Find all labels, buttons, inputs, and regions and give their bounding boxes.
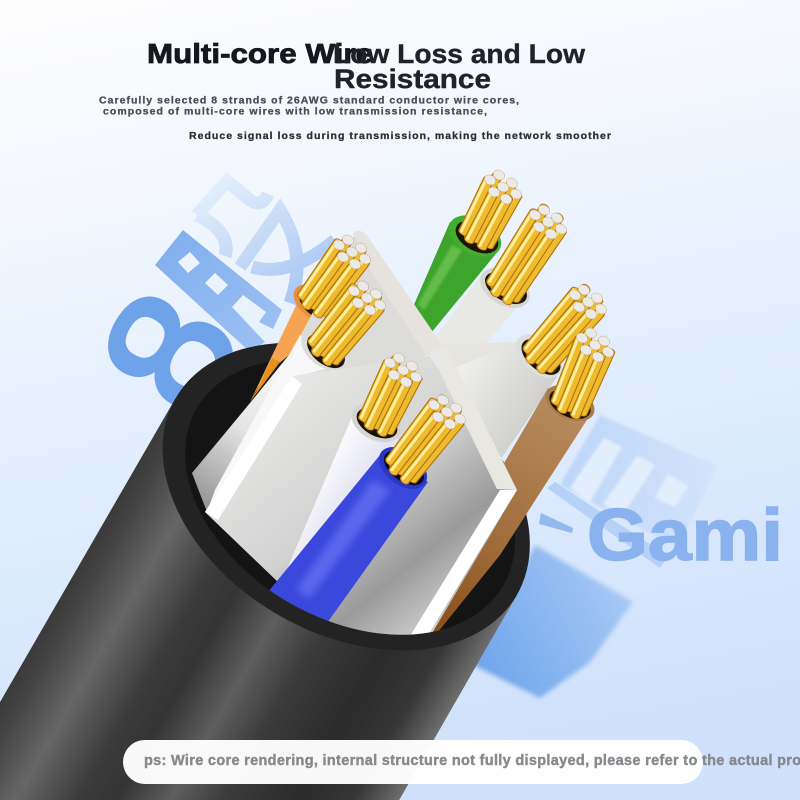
- white wire jacket left: [207, 319, 355, 512]
- gold conductor: white lower wire: [357, 351, 424, 437]
- Gami watermark text: Gami: [587, 495, 783, 576]
- gold conductor: blue wire: [383, 393, 468, 485]
- decorative blue stripes: [539, 482, 668, 568]
- description line one: Carefully selected 8 strands of 26AWG standard conductor wire cores,: [99, 94, 519, 106]
- gold conductor: white right wire: [520, 283, 609, 374]
- white wire jacket beside green: [428, 260, 537, 352]
- gold conductor: white wire beside green: [484, 203, 569, 305]
- cable black outer body: [0, 398, 517, 800]
- decorative numeral 8: 8: [63, 261, 277, 442]
- description line three: Reduce signal loss during transmission, making the network smoother: [189, 130, 611, 142]
- decorative blue block shape: [155, 230, 282, 352]
- right spacer arm: [427, 342, 520, 372]
- cable front ring lip: [163, 398, 517, 650]
- lower spacer slab: [205, 346, 517, 640]
- left grey spacer fin: [192, 345, 300, 512]
- title line three: Resistance: [334, 64, 491, 94]
- green wire jacket: [413, 207, 508, 333]
- title line two: Low Loss and Low: [333, 39, 586, 69]
- blue wire jacket: [268, 438, 435, 630]
- upper spacer fin: [290, 231, 442, 382]
- footnote pill: [123, 740, 703, 784]
- cable mouth back ring: [107, 280, 585, 714]
- white wire jacket lower: [278, 396, 407, 600]
- title line one: Multi-core Wire: [147, 38, 373, 69]
- decorative faded arcs: [197, 181, 335, 303]
- orange wire jacket: [250, 277, 343, 402]
- decorative comb shape: [560, 415, 717, 548]
- decorative blurred blue block: [473, 545, 633, 698]
- gold conductor: white left wire: [306, 279, 388, 366]
- description line two: composed of multi-core wires with low transmission resistance,: [103, 106, 487, 118]
- white wire jacket right: [450, 326, 571, 500]
- brown wire jacket: [425, 378, 600, 634]
- gold conductor: orange wire: [296, 233, 373, 319]
- gold conductor: brown wire: [550, 326, 616, 418]
- gold conductor: green wire: [458, 168, 524, 250]
